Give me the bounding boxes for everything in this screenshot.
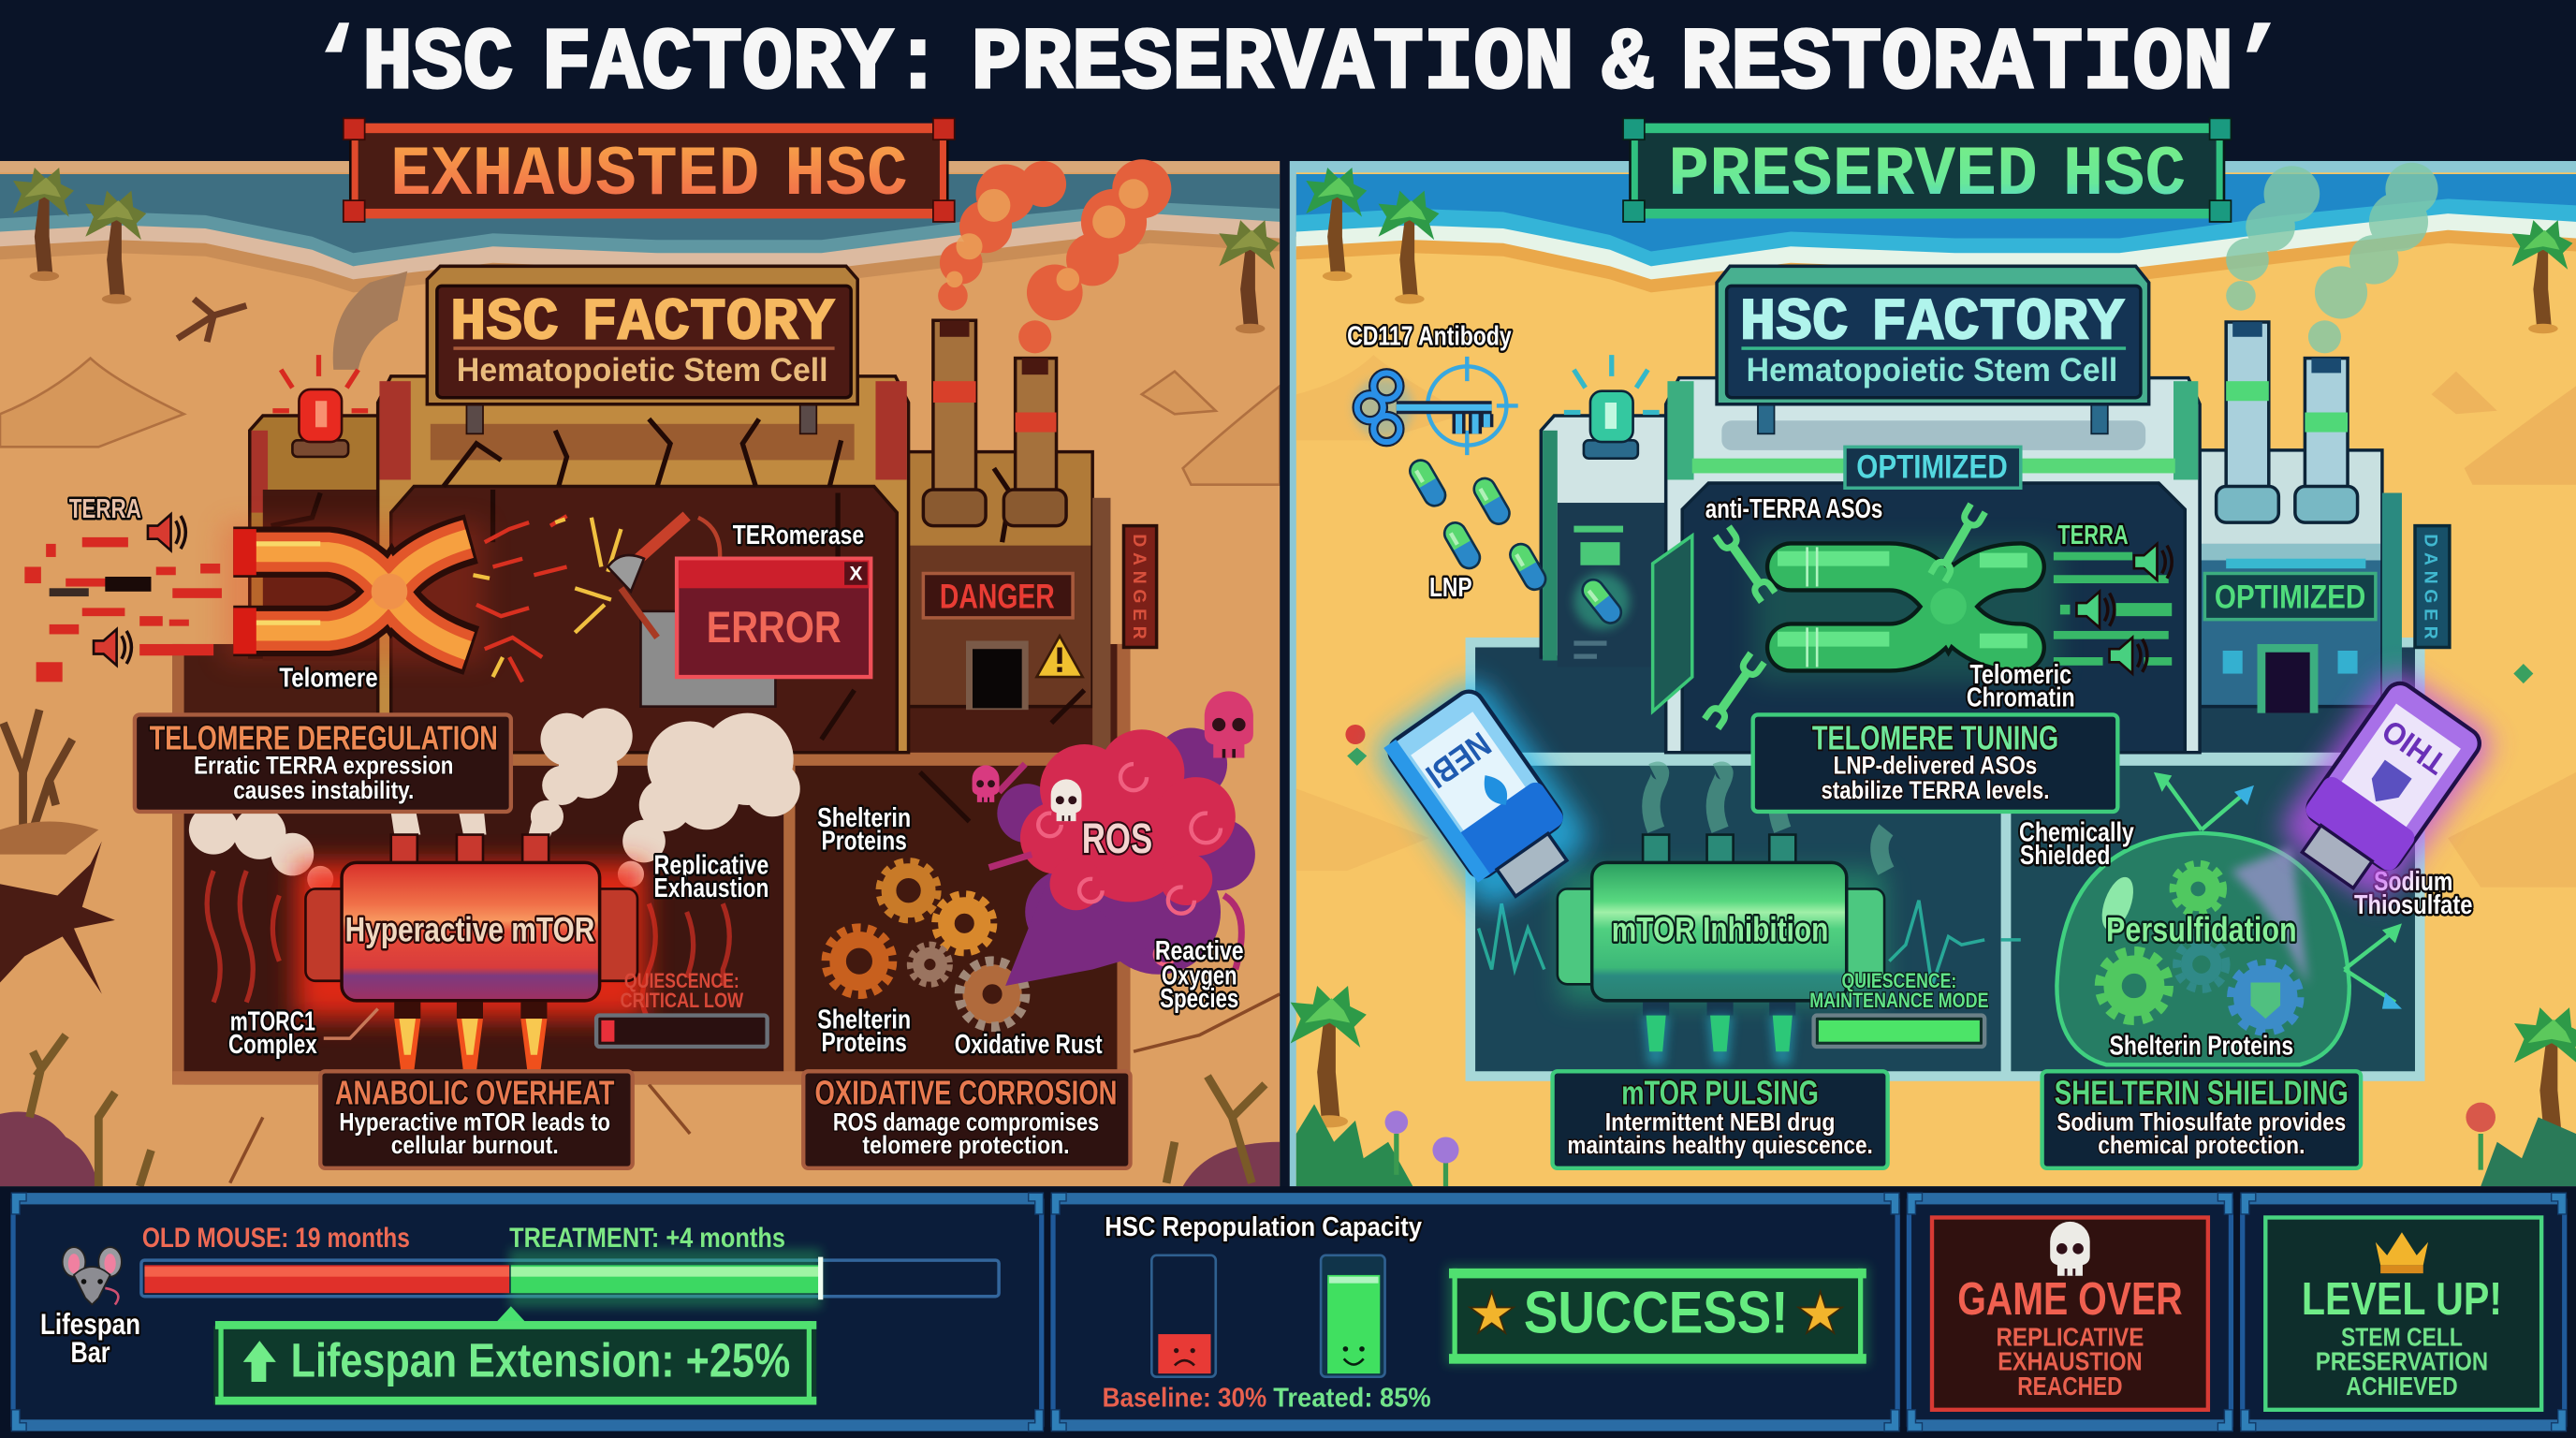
panel: lifespan bar: Bar: [70, 1335, 110, 1369]
icon: speaker two: [2076, 592, 2115, 627]
label: mTORC1: mTORC1: [230, 1006, 315, 1036]
icon: skull white: [1051, 779, 1081, 821]
side sign: DANGER: [1123, 526, 1157, 647]
callout: shelterin shielding: SHELTERIN SHIELDING: [2055, 1073, 2349, 1111]
sign: HSC factory: HSC FACTORY: [1740, 289, 2124, 357]
callout: anabolic overheat: cellular burnout.: [391, 1130, 559, 1159]
panel: repopulation capacity: [1051, 1193, 1899, 1431]
desert dunes and debris: [0, 359, 184, 447]
engine: mTOR inhibition: mTOR Inhibition: [1612, 911, 1828, 949]
banner: exhausted HSC: [344, 118, 955, 222]
label: reactive oxygen species: Reactive: [1155, 936, 1244, 966]
label: telomeric chromatin: [1967, 660, 2075, 713]
gears: [827, 862, 1025, 1027]
icon: red alarm: [272, 355, 368, 457]
lower wall block: [172, 644, 1131, 1084]
title: ‘HSC FACTORY: PRESERVATION & RESTORATION’: [312, 15, 2284, 113]
panel: game over: REACHED: [2017, 1372, 2123, 1401]
sign: HSC factory: [1717, 266, 2149, 404]
callout: shelterin shielding: [2042, 1071, 2361, 1168]
bottom dashboard: [0, 1186, 2576, 1438]
panel: level up: [2241, 1193, 2566, 1431]
right wing: [2200, 450, 2382, 707]
error dialog: X: [849, 564, 862, 585]
label: CD117 antibody: CD117 Antibody: [1347, 322, 1512, 352]
quiescence meter critical: QUIESCENCE:: [624, 969, 739, 992]
icon: LNP capsules: [1406, 456, 1630, 629]
panel: level up: STEM CELL: [2341, 1322, 2463, 1351]
icon: warning triangle: [1036, 636, 1083, 677]
icon: antibody key: [1354, 357, 1518, 455]
quiescence meter maintenance: MAINTENANCE MODE: [1809, 989, 1989, 1012]
sign: HSC factory: [427, 266, 857, 404]
bottle: THIO: [2274, 665, 2499, 908]
label: shelterin lower: Shelterin: [817, 1005, 911, 1035]
icon: speaker lower: [94, 629, 131, 666]
engine: hyperactive mTOR: [296, 835, 646, 1071]
cracks: [271, 419, 1084, 822]
label: telomeric chromatin: Telomeric: [1969, 660, 2071, 690]
bottle: NEBI: [1369, 672, 1595, 917]
callout: telomere tuning: [1753, 714, 2117, 812]
callout: oxidative corrosion: telomere protection.: [862, 1130, 1070, 1159]
chromosome: healthy telomere: [1754, 542, 2058, 682]
scattered TERRA fragments: [24, 537, 222, 682]
panel: repopulation capacity: Baseline: 30%: [1103, 1383, 1266, 1413]
dome: persulfidation shield: Persulfidation: [2106, 911, 2297, 949]
lower wall block: [1466, 638, 2425, 1081]
sign: HSC factory: Hematopoietic Stem Cell: [457, 352, 828, 389]
palm trees: [1291, 168, 2576, 1143]
label: sodium thiosulfate: Thiosulfate: [2354, 890, 2472, 920]
callout: oxidative corrosion: OXIDATIVE CORROSION: [815, 1073, 1117, 1111]
callout: telomere deregulation: Erratic TERRA expression: [194, 751, 453, 780]
open panel door: [1653, 536, 1692, 712]
label: oxidative rust: Oxidative Rust: [955, 1030, 1103, 1060]
sign: DANGER: DANGER: [940, 577, 1055, 615]
panel: repopulation capacity: HSC Repopulation Capacity: [1105, 1212, 1422, 1242]
bottle: NEBI: NEBI: [1419, 725, 1498, 796]
sea: [0, 174, 1280, 270]
panel: preserved HSC scene: [1288, 161, 2576, 1190]
callout: anabolic overheat: ANABOLIC OVERHEAT: [335, 1073, 614, 1111]
green smoke: [2226, 163, 2438, 353]
error dialog: ERROR: [707, 603, 842, 653]
badge: success: SUCCESS!: [1524, 1280, 1788, 1345]
callout: mTOR pulsing: [1553, 1071, 1888, 1168]
sign: HSC factory: HSC FACTORY: [450, 289, 835, 357]
callout: telomere deregulation: TELOMERE DEREGULATION: [150, 718, 498, 756]
arrows: [2154, 772, 2402, 1009]
callout: telomere deregulation: [135, 714, 511, 812]
main building: [378, 376, 909, 753]
right smoke stack: [1003, 359, 1066, 526]
callout: mTOR pulsing: Intermittent NEBI drug: [1605, 1107, 1835, 1136]
label: reactive oxygen species: [1155, 936, 1244, 1014]
engine: hyperactive mTOR: Hyperactive mTOR: [345, 911, 594, 949]
side sign: DANGER: [2421, 534, 2440, 639]
wrench and machine: [607, 516, 775, 707]
chromosome: damaged telomere: [222, 522, 485, 662]
quiescence meter critical: [596, 969, 768, 1047]
steam clouds: [189, 708, 800, 892]
badge: optimized wing: OPTIMIZED: [2215, 579, 2365, 615]
label: TERRA: TERRA: [69, 494, 141, 524]
badge: optimized top: OPTIMIZED: [1856, 449, 2008, 486]
dunes: [1296, 355, 1466, 440]
lifespan progress bar: [141, 1249, 999, 1308]
panel: lifespan bar: [11, 1193, 1043, 1431]
label: reactive oxygen species: Species: [1160, 984, 1238, 1014]
vessel: treated: [1321, 1255, 1385, 1377]
callout: telomere tuning: LNP-delivered ASOs: [1834, 751, 2037, 780]
label: exhaustion: Exhaustion: [654, 873, 768, 903]
label: reactive oxygen species: Oxygen: [1162, 961, 1237, 990]
quiescence meter maintenance: QUIESCENCE:: [1841, 969, 1956, 992]
badge: optimized wing: [2204, 574, 2376, 620]
dome: persulfidation shield: [2056, 833, 2349, 1064]
label: chemically shielded: [2019, 818, 2134, 871]
callout: lifespan extension: [213, 1306, 816, 1405]
sparks and fragments: [473, 516, 621, 682]
divider between panels: [1280, 161, 1290, 1190]
right smoke stack: [2295, 359, 2358, 522]
panel: game over: GAME OVER: [1957, 1274, 2183, 1325]
cloud: ROS: [989, 727, 1255, 986]
vessel: baseline: [1151, 1255, 1216, 1377]
label: shelterin upper: Shelterin: [817, 803, 911, 833]
smoke from stacks: [938, 159, 1171, 353]
panel: game over: EXHAUSTION: [1998, 1347, 2143, 1376]
engine: mTOR inhibition: [1558, 770, 1886, 1064]
factory building: [1466, 322, 2425, 1081]
panel frame: [1288, 161, 2576, 1190]
callout: telomere tuning: stabilize TERRA levels.: [1822, 775, 2049, 804]
callout: anabolic overheat: [320, 1071, 633, 1168]
support posts: [466, 394, 483, 433]
banner: preserved HSC: PRESERVED HSC: [1668, 135, 2186, 215]
banner: preserved HSC: [1623, 118, 2231, 222]
dome: persulfidation shield: Shelterin Proteins: [2110, 1032, 2293, 1062]
purple shrubs and dry plants: [0, 1035, 1280, 1186]
quiescence meter critical: CRITICAL LOW: [621, 989, 743, 1012]
ground crack: [0, 842, 115, 994]
banner: exhausted HSC: EXHAUSTED HSC: [390, 135, 908, 215]
left smoke stack: [2217, 322, 2278, 522]
callout line: [324, 1009, 378, 1038]
left smoke stack: [923, 320, 986, 526]
panel: lifespan bar: Lifespan: [40, 1307, 140, 1341]
left wing: [1541, 416, 1669, 657]
label: TERomerase: TERomerase: [733, 521, 864, 550]
cloud: ROS: ROS: [1082, 814, 1152, 862]
label: sodium thiosulfate: [2354, 867, 2472, 920]
icon: skull pink small: [973, 765, 1000, 802]
door: [2258, 644, 2318, 713]
panel: lifespan bar: TREATMENT: +4 months: [509, 1223, 785, 1254]
main building: [1666, 378, 2200, 753]
sign: HSC factory: Hematopoietic Stem Cell: [1747, 352, 2117, 389]
icon: speaker upper: [148, 514, 185, 550]
bottle: THIO: THIO: [2377, 712, 2452, 780]
grey smoke from alarm: [333, 271, 407, 370]
sea: [1296, 174, 2576, 270]
door: [966, 640, 1029, 710]
panel: level up: LEVEL UP!: [2302, 1274, 2502, 1325]
callout: mTOR pulsing: maintains healthy quiescence.: [1567, 1130, 1873, 1159]
wrenches: [1705, 504, 1985, 728]
label: replicative exhaustion: Replicative: [654, 851, 768, 881]
support posts: [1758, 398, 1775, 433]
callout: telomere tuning: TELOMERE TUNING: [1812, 718, 2058, 756]
label: TERRA: TERRA: [2057, 521, 2129, 550]
callout: anabolic overheat: Hyperactive mTOR leads to: [339, 1107, 610, 1136]
callout: mTOR pulsing: mTOR PULSING: [1621, 1073, 1819, 1111]
label: Telomere: Telomere: [279, 664, 378, 694]
callout: oxidative corrosion: [803, 1071, 1131, 1168]
icon: teal alarm: [1564, 355, 1660, 459]
label: chemically shielded: Shielded: [2020, 841, 2110, 871]
label: complex: Complex: [228, 1030, 317, 1060]
side sign: DANGER: DANGER: [1129, 534, 1149, 639]
label: LNP: LNP: [1429, 573, 1472, 603]
section: shelterin gears and ROS: [827, 691, 1255, 1027]
error dialog: [677, 559, 871, 677]
factory building: [172, 320, 1131, 1084]
label: anti-TERRA ASOs: anti-TERRA ASOs: [1705, 494, 1882, 524]
label: sodium thiosulfate: Sodium: [2374, 867, 2452, 897]
left wing: [250, 416, 381, 657]
panel: game over: [1908, 1193, 2232, 1431]
plants and flowers: [1296, 664, 2576, 1186]
pulse lines: [1479, 901, 2021, 986]
icon: skull pink large: [1205, 691, 1253, 758]
palm trees: [13, 168, 1280, 333]
side sign: [2415, 526, 2450, 647]
label: chemically shielded: Chemically: [2019, 818, 2134, 848]
panel: repopulation capacity: Treated: 85%: [1273, 1383, 1431, 1413]
right wing: [907, 452, 1092, 707]
callout: lifespan extension: Lifespan Extension: +25%: [291, 1334, 790, 1387]
panel frame: [0, 161, 1284, 1190]
callout: oxidative corrosion: ROS damage compromises: [833, 1107, 1099, 1136]
terra signal dashes: [2054, 552, 2172, 666]
callout: shelterin shielding: chemical protection.: [2098, 1130, 2305, 1159]
exhaust jets: [1643, 1003, 1795, 1064]
label: proteins lower: Proteins: [822, 1028, 907, 1058]
icon: mouse: [63, 1247, 122, 1304]
callout: telomere deregulation: causes instability.: [233, 775, 414, 804]
panel: lifespan bar: OLD MOUSE: 19 months: [142, 1223, 410, 1254]
dead trees: [4, 710, 72, 829]
heat waves: [207, 871, 729, 1019]
callout: shelterin shielding: Sodium Thiosulfate provides: [2056, 1107, 2346, 1136]
panel: level up: ACHIEVED: [2346, 1372, 2458, 1401]
label: proteins upper: Proteins: [822, 826, 907, 856]
quiescence meter maintenance: [1809, 969, 1989, 1047]
panel: exhausted HSC scene: [0, 159, 1284, 1190]
badge: success: [1445, 1265, 1869, 1365]
icon: speaker three: [2110, 638, 2147, 674]
exhaust flames: [394, 1003, 547, 1071]
icon: speaker one: [2134, 544, 2172, 580]
label: telomeric chromatin: Chromatin: [1967, 683, 2075, 713]
panel: game over: REPLICATIVE: [1996, 1322, 2144, 1351]
panel: level up: PRESERVATION: [2316, 1347, 2488, 1376]
